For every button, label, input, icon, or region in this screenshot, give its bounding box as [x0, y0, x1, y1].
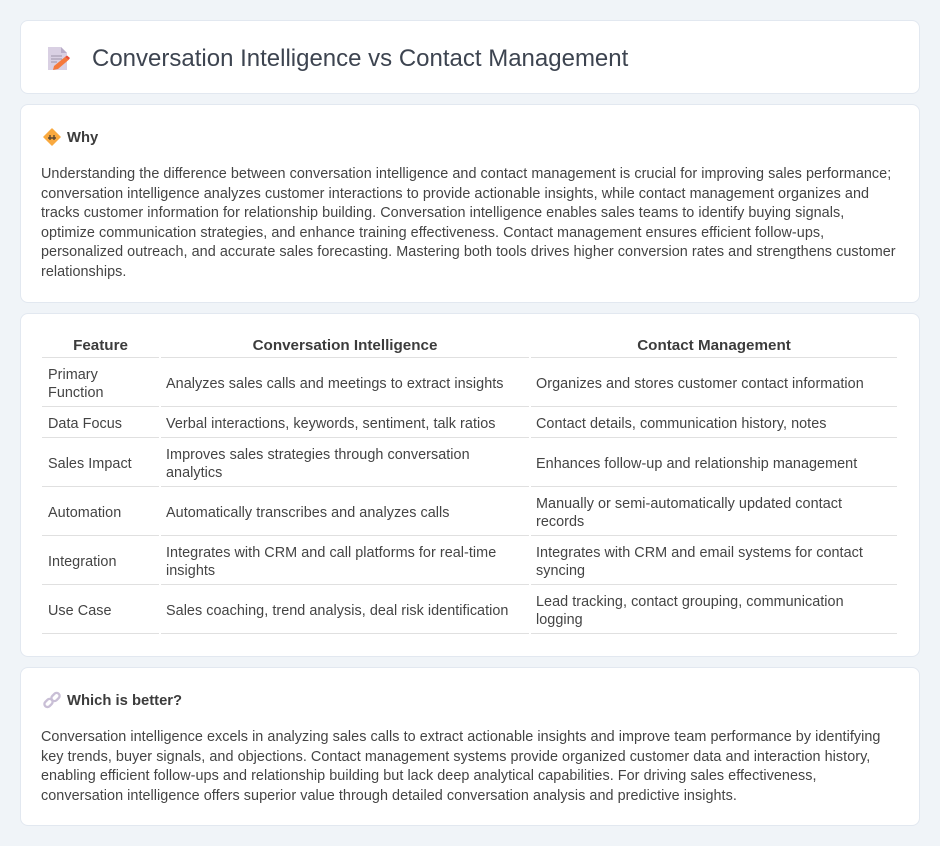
heading: why: Why — [67, 130, 98, 146]
table header: feature: Feature — [73, 337, 128, 354]
cell: logging — [536, 612, 583, 628]
why text: personalized outreach, and accurate sales forecasting. Mastering both tools drives higher conversion rates and strengthens customer — [41, 244, 896, 260]
cell: Organizes and stores customer contact information — [536, 376, 864, 392]
why text: relationships. — [41, 264, 126, 280]
panel: which is better — [20, 667, 920, 826]
icon: link — [43, 692, 61, 708]
panel: comparison table — [20, 313, 920, 657]
why text: conversation intelligence analyzes customer interactions to provide actionable insights, while contact management organizes and — [41, 186, 869, 202]
cell — [536, 594, 844, 628]
cell: Lead tracking, contact grouping, communication — [536, 594, 844, 610]
cell: Integrates with CRM and call platforms for real-time — [166, 545, 496, 561]
cell: Contact details, communication history, notes — [536, 416, 827, 432]
row: use case: Use Case — [48, 603, 112, 619]
cell — [166, 447, 470, 481]
heading: which is better: Which is better? — [67, 693, 182, 709]
table header: contact management: Contact Management — [637, 337, 791, 354]
cell: analytics — [166, 465, 222, 481]
cell: Analyzes sales calls and meetings to extract insights — [166, 376, 504, 392]
panel: why — [20, 104, 920, 303]
table header: conversation intelligence: Conversation Intelligence — [253, 337, 437, 354]
conclusion text: Conversation intelligence excels in analyzing sales calls to extract actionable insights and improve team performance by identifying — [41, 729, 880, 745]
cell: syncing — [536, 563, 585, 579]
conclusion text: conversation intelligence offers superior value through detailed conversation analysis and predictive insights. — [41, 788, 737, 804]
row: primary function: Primary — [48, 367, 98, 383]
cell: insights — [166, 563, 215, 579]
cell — [536, 545, 863, 579]
cell: Verbal interactions, keywords, sentiment, talk ratios — [166, 416, 496, 432]
cell: records — [536, 514, 584, 530]
conclusion text: enabling efficient follow-ups and relationship building but lack deep analytical capabilities. For driving sales effectiveness, — [41, 768, 817, 784]
row: automation: Automation — [48, 505, 121, 521]
icon: diamond sign — [43, 128, 61, 146]
cell: Sales coaching, trend analysis, deal risk identification — [166, 603, 508, 619]
row: sales impact: Sales Impact — [48, 456, 132, 472]
row: primary function: Function — [48, 385, 104, 401]
cell: Improves sales strategies through conversation — [166, 447, 470, 463]
conclusion text: key trends, buyer signals, and objections. Contact management systems provide organized customer data and interaction history, — [41, 749, 870, 765]
row: primary function — [48, 367, 104, 401]
row: integration: Integration — [48, 554, 116, 570]
why text — [41, 166, 896, 280]
cell: Enhances follow-up and relationship management — [536, 456, 857, 472]
conclusion text — [41, 729, 880, 804]
header card — [20, 20, 920, 94]
why text: optimize communication strategies, and enhance training effectiveness. Contact management ensures efficient follow-ups, — [41, 225, 824, 241]
cell: Integrates with CRM and email systems for contact — [536, 545, 863, 561]
why text: Understanding the difference between conversation intelligence and contact management is crucial for improving sales performance; — [41, 166, 891, 182]
cell — [536, 496, 842, 530]
icon: document with pencil — [48, 47, 70, 70]
cell — [166, 545, 496, 579]
cell: Automatically transcribes and analyzes calls — [166, 505, 450, 521]
why text: tracks customer information for relationship building. Conversation intelligence enables sales teams to identify buying signals, — [41, 205, 844, 221]
cell: Manually or semi-automatically updated contact — [536, 496, 842, 512]
row: data focus: Data Focus — [48, 416, 122, 432]
title: Conversation Intelligence vs Contact Management — [92, 45, 628, 72]
